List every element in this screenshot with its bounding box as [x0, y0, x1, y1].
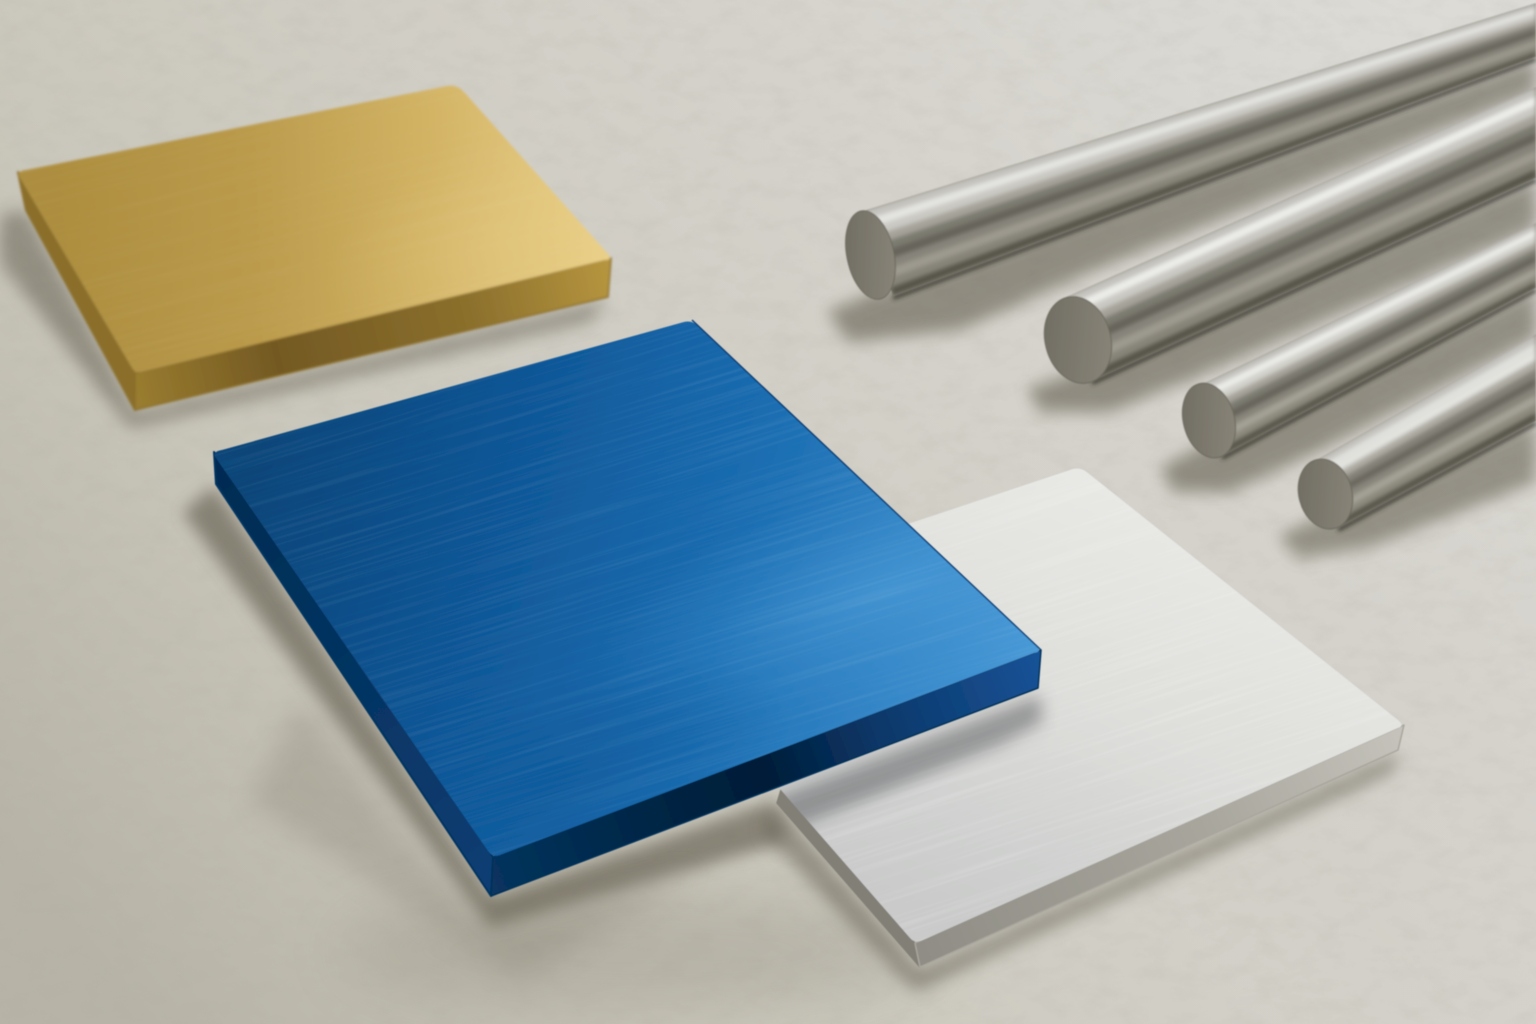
rod 3: [1175, 223, 1536, 464]
gold plate left edge: [18, 172, 135, 410]
steel rods: [838, 3, 1536, 535]
gold plate front edge: [135, 258, 611, 410]
gold brushed plate: [15, 84, 614, 412]
rod 4: [1291, 334, 1536, 535]
rod 1: [838, 3, 1536, 304]
blue plate front edge: [491, 650, 1041, 896]
blue anodized plate: [212, 319, 1042, 898]
silver plate left edge: [777, 790, 920, 967]
silver brushed plate: [776, 468, 1405, 967]
silver plate top face: [780, 468, 1402, 942]
silver plate front edge: [915, 725, 1404, 967]
blue plate left edge: [214, 452, 493, 896]
rod 2: [1035, 87, 1536, 391]
gold plate top face: [18, 84, 611, 374]
blue plate top face: [214, 320, 1040, 856]
